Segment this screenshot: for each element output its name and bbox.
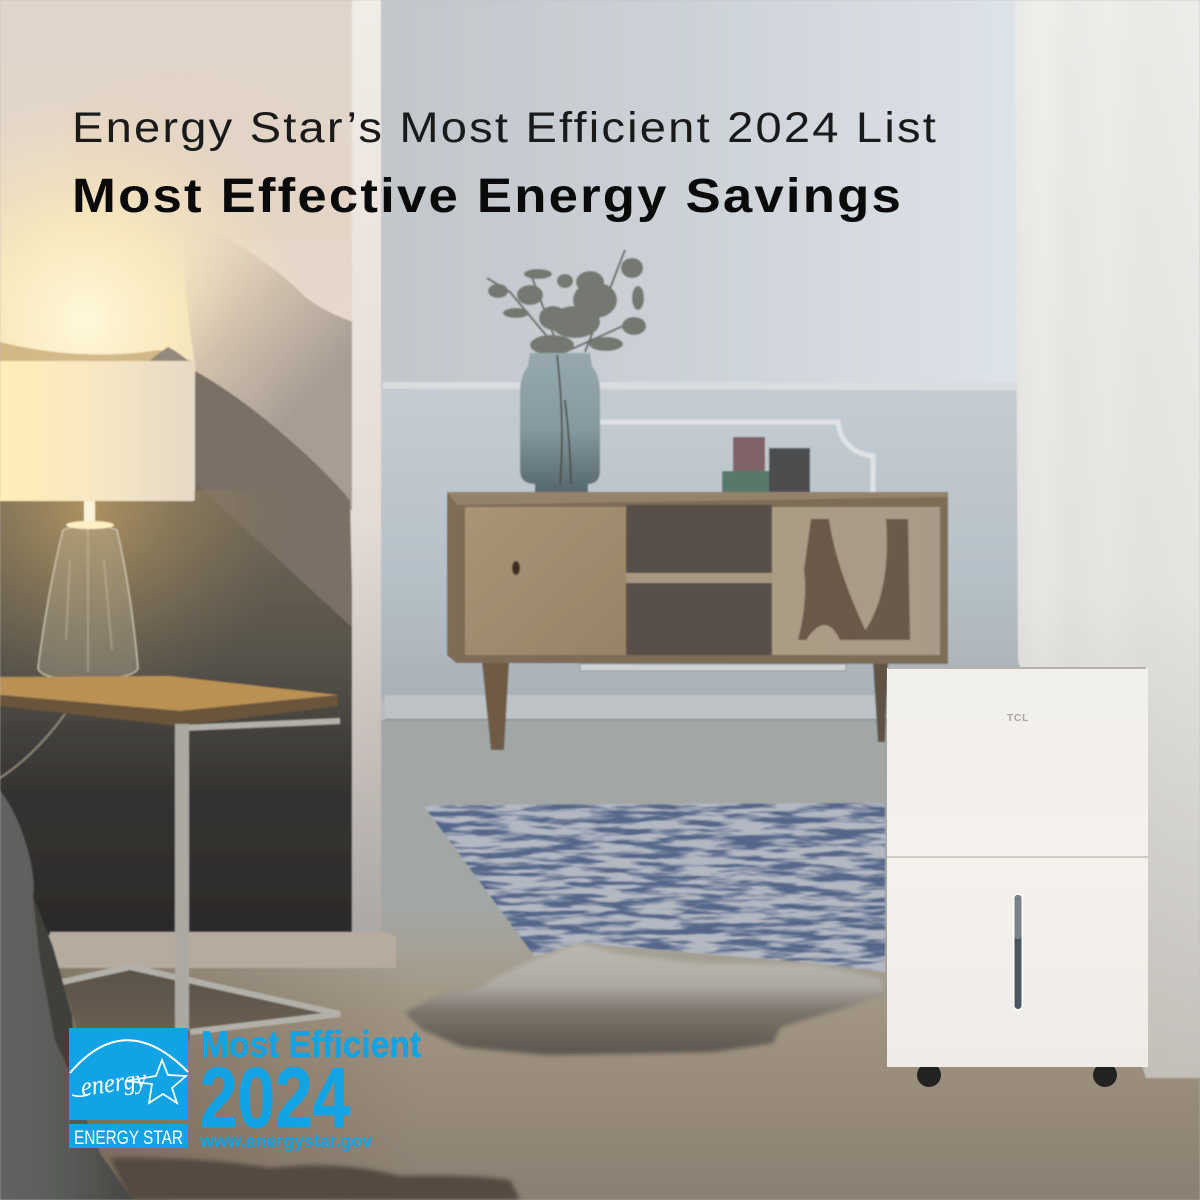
side table bbox=[0, 676, 340, 1060]
subtitle line: Energy Star’s Most Efficient 2024 List bbox=[72, 104, 938, 152]
water level window bbox=[1013, 893, 1023, 1011]
dehumidifier body bbox=[887, 668, 1148, 1067]
floor bbox=[0, 720, 1200, 1200]
open shelf bbox=[626, 505, 772, 655]
small boxes on credenza bbox=[722, 437, 810, 492]
wheels bbox=[917, 1063, 1117, 1087]
Most Efficient 2024 badge text bbox=[199, 1024, 421, 1151]
vase with plant bbox=[487, 250, 646, 492]
TCL logo: TCL bbox=[1007, 712, 1029, 724]
arc bbox=[70, 1040, 188, 1073]
swash bbox=[72, 1094, 90, 1096]
glass base bbox=[38, 524, 138, 680]
main title: Most Effective Energy Savings bbox=[72, 170, 903, 223]
plant leaves bbox=[487, 250, 646, 355]
centre wall bbox=[380, 0, 1025, 721]
left mural wall bbox=[0, 0, 353, 935]
right door bbox=[772, 507, 940, 655]
lamp neck bbox=[84, 501, 95, 525]
legs bbox=[482, 662, 509, 750]
blue square mark bbox=[69, 1028, 188, 1120]
grey blanket bbox=[0, 790, 133, 1200]
website: www.energystar.gov bbox=[199, 1131, 372, 1151]
wood grain bbox=[798, 519, 870, 640]
table lamp bbox=[0, 361, 194, 680]
year: 2024 bbox=[200, 1051, 350, 1146]
baseboard bbox=[50, 932, 396, 968]
patterned area rug bbox=[423, 803, 885, 972]
lamp shade bbox=[0, 361, 194, 501]
dehumidifier product bbox=[887, 667, 1148, 1087]
cabinet body bbox=[447, 492, 948, 664]
table top bbox=[0, 676, 338, 711]
right curtain bbox=[1015, 0, 1200, 1078]
heading bbox=[72, 104, 938, 223]
star outline bbox=[126, 1060, 186, 1103]
sheepskin rug bbox=[405, 943, 887, 1055]
blue label band bbox=[69, 1124, 188, 1148]
credenza bbox=[447, 492, 948, 750]
metal frame bbox=[62, 721, 340, 1032]
left door bbox=[465, 507, 626, 655]
panel seam bbox=[887, 856, 1148, 858]
most efficient: Most Efficient bbox=[201, 1024, 421, 1065]
energy script: energy bbox=[79, 1063, 148, 1102]
ENERGY STAR label: ENERGY STAR bbox=[74, 1128, 183, 1149]
white column bbox=[352, 0, 381, 935]
dark bottom rug bbox=[110, 1158, 520, 1200]
shaded floor left side bbox=[0, 960, 420, 1200]
under table floor bbox=[64, 968, 340, 1060]
Energy Star logo bbox=[69, 1028, 188, 1149]
vase glass bbox=[520, 353, 600, 492]
